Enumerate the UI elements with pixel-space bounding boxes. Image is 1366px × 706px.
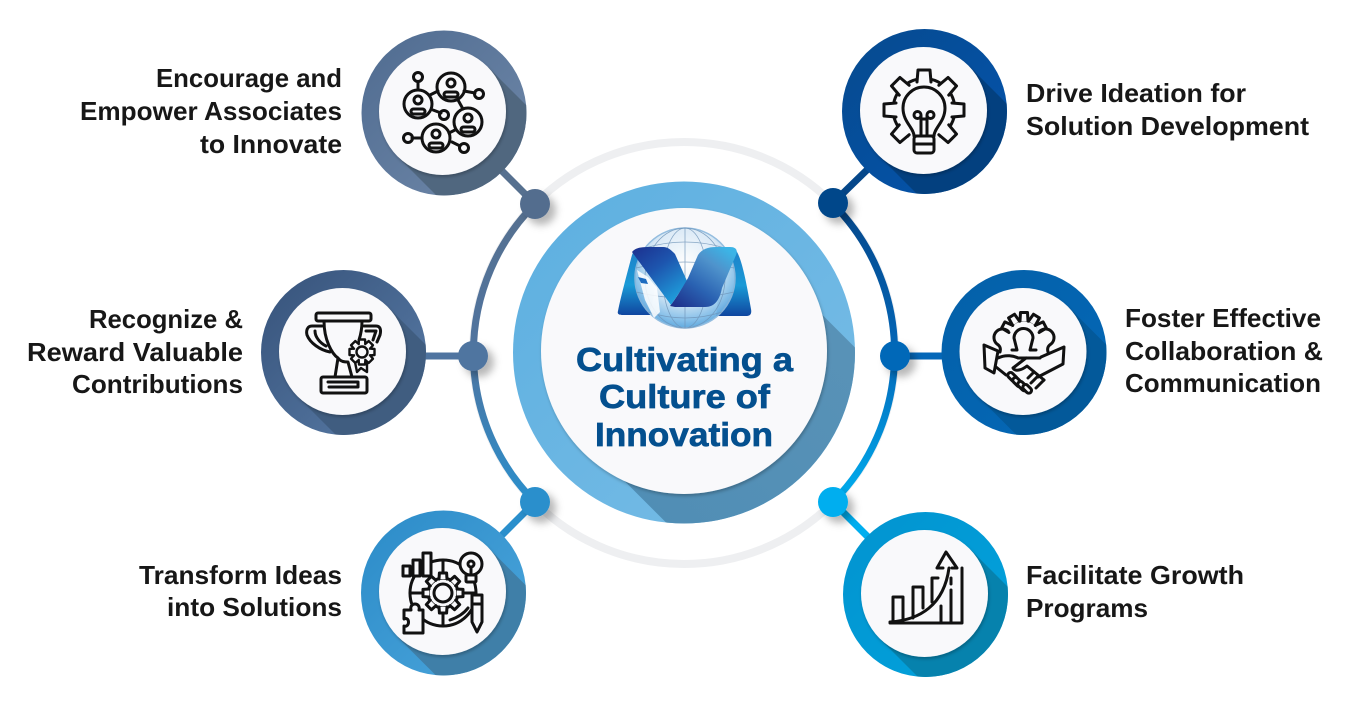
- connector: [424, 352, 473, 360]
- hub ring: [513, 182, 855, 524]
- icon: people network: [404, 72, 484, 152]
- node: Recognize and Reward: [28, 270, 458, 435]
- ring: [362, 30, 526, 196]
- icon: rising bar chart with arrow: [890, 552, 962, 623]
- node: Foster Collaboration: [910, 270, 1322, 435]
- node: Facilitate Growth: [840, 510, 1242, 677]
- icon: trophy with rosette: [307, 313, 381, 393]
- label: Collaboration &: [1125, 336, 1323, 366]
- right orbit arc: [833, 204, 895, 502]
- hub title: Cultivating a: [576, 341, 794, 378]
- connector: [895, 352, 944, 360]
- left orbit arc: [473, 204, 535, 502]
- central hub: [513, 182, 855, 524]
- dot: bottom right: [818, 487, 848, 517]
- label: [80, 63, 342, 159]
- label: Recognize &: [89, 304, 243, 334]
- dot: top left: [520, 189, 550, 219]
- label: [1026, 560, 1244, 623]
- icon: handshake with team and gear: [984, 312, 1064, 394]
- node: Drive Ideation: [841, 29, 1309, 196]
- ring: [942, 270, 1106, 435]
- ring: [361, 510, 526, 676]
- label: Empower Associates: [80, 96, 342, 126]
- hub title: Innovation: [595, 416, 773, 453]
- icon: lightbulb in gear: [884, 70, 964, 153]
- label: Transform Ideas: [139, 560, 342, 590]
- connector: [498, 167, 535, 204]
- label: Facilitate Growth: [1026, 560, 1244, 590]
- dot: middle right: [880, 341, 910, 371]
- label: into Solutions: [167, 592, 342, 622]
- node: Encourage and Empower Associates: [82, 30, 528, 196]
- icon: gear, chart, bulb, puzzle, pencil: [403, 553, 482, 633]
- hub title: [576, 341, 794, 453]
- label: Foster Effective: [1125, 303, 1321, 333]
- dot: top right: [818, 188, 848, 218]
- hub title: Culture of: [599, 378, 771, 415]
- label: [139, 560, 342, 622]
- ring: [843, 512, 1008, 677]
- label: Contributions: [72, 369, 243, 399]
- label: Encourage and: [156, 63, 342, 93]
- label: [1125, 303, 1323, 398]
- label: [1026, 78, 1309, 141]
- connector: [833, 167, 870, 203]
- connector: [833, 502, 870, 539]
- label: Programs: [1026, 593, 1148, 623]
- node: Transform Ideas: [139, 510, 528, 676]
- label: Solution Development: [1026, 111, 1309, 141]
- dot: middle left: [458, 341, 488, 371]
- node dots on orbit: [458, 188, 910, 517]
- dot: bottom left: [520, 487, 550, 517]
- ring: [842, 29, 1007, 194]
- label: Drive Ideation for: [1026, 78, 1246, 108]
- logo: globe and M mark: [618, 228, 751, 328]
- connector: [500, 502, 535, 537]
- label: Reward Valuable: [27, 337, 243, 367]
- label: Communication: [1125, 368, 1321, 398]
- ring: [261, 270, 426, 435]
- outer grey orbit ring: [473, 142, 895, 564]
- label: to Innovate: [200, 129, 342, 159]
- label: [27, 304, 243, 399]
